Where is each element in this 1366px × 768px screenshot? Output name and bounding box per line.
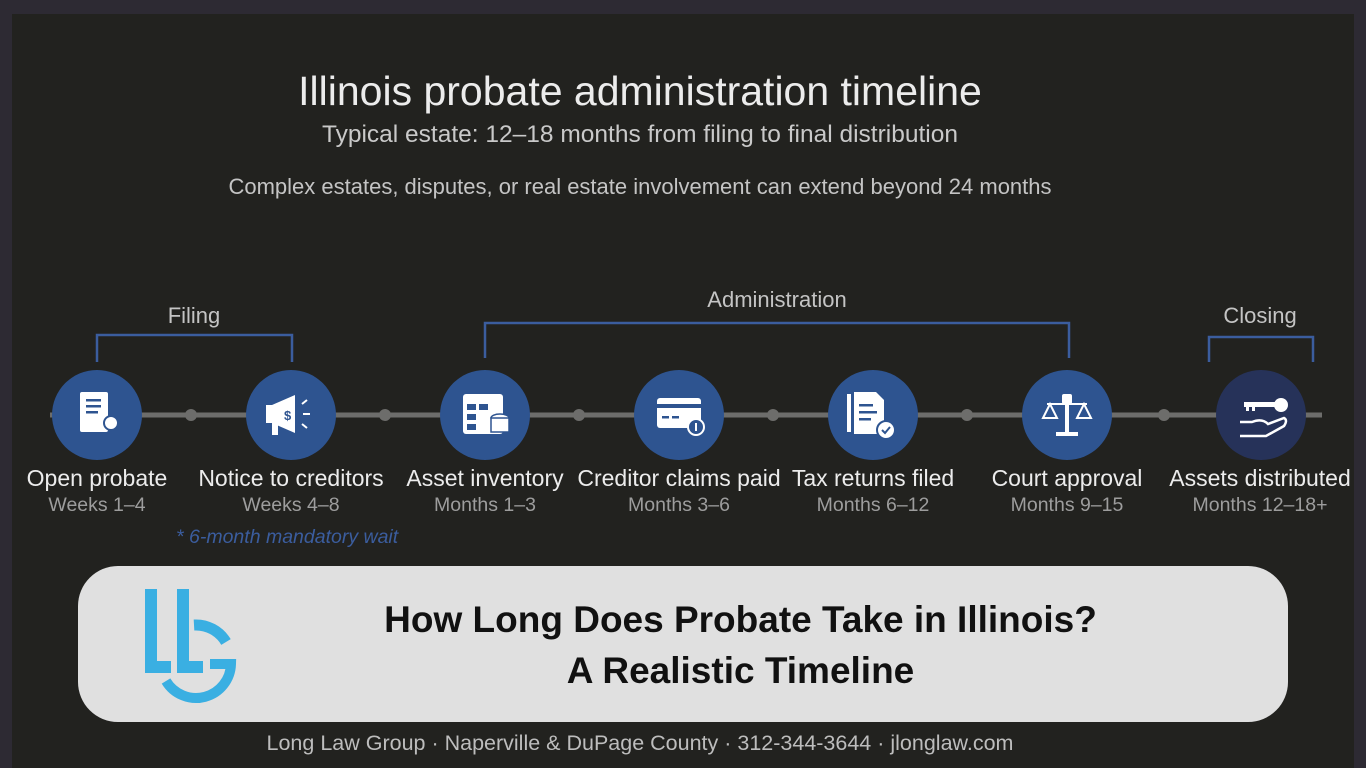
step labels: Notice to creditors <box>198 465 384 491</box>
icon: credit card <box>634 370 724 460</box>
step labels: Months 3–6 <box>628 494 730 516</box>
step labels: Weeks 1–4 <box>48 494 146 516</box>
bracket: Closing <box>1209 303 1313 362</box>
bracket: Administration <box>485 287 1069 358</box>
step labels: Court approval <box>992 465 1142 491</box>
step labels: Asset inventory <box>406 465 564 491</box>
step labels: Weeks 4–8 <box>242 494 340 516</box>
icon: tax returns <box>828 370 918 460</box>
step labels: Months 1–3 <box>434 494 536 516</box>
bracket: Filing <box>97 303 292 362</box>
icon: megaphone notice: $ <box>284 408 292 423</box>
step labels <box>27 465 1351 516</box>
footer: Long Law Group · Naperville & DuPage County · 312-344-3644 · jlonglaw.com <box>267 731 1013 755</box>
mandatory wait note: * 6-month mandatory wait <box>176 526 398 548</box>
icon: key in hand <box>1216 370 1306 460</box>
title banner <box>78 566 1288 722</box>
subtitle: Typical estate: 12–18 months from filing to final distribution <box>322 121 958 148</box>
step labels: Months 12–18+ <box>1192 494 1327 516</box>
step labels: Months 6–12 <box>817 494 929 516</box>
banner heading: How Long Does Probate Take in Illinois? <box>384 599 1097 640</box>
title: Illinois probate administration timeline <box>298 68 982 114</box>
logo <box>145 589 236 703</box>
icon: open probate document <box>52 370 142 460</box>
step labels: Creditor claims paid <box>577 465 781 491</box>
step labels: Assets distributed <box>1169 465 1351 491</box>
icon: asset inventory table <box>440 370 530 460</box>
step labels: Months 9–15 <box>1011 494 1123 516</box>
step labels: Tax returns filed <box>792 465 954 491</box>
bracket: Closing: Closing <box>1223 303 1297 328</box>
banner heading: A Realistic Timeline <box>567 650 914 691</box>
icon: scales court approval <box>1022 370 1112 460</box>
bracket: Filing: Filing <box>168 303 220 328</box>
timeline line <box>50 409 1322 421</box>
banner heading <box>384 599 1097 691</box>
note: complex estates: Complex estates, disputes, or real estate involvement can extend beyond 24 months <box>228 174 1052 199</box>
icon: megaphone notice <box>246 370 336 460</box>
bracket: Administration: Administration <box>707 287 847 312</box>
step labels: Open probate <box>27 465 167 491</box>
